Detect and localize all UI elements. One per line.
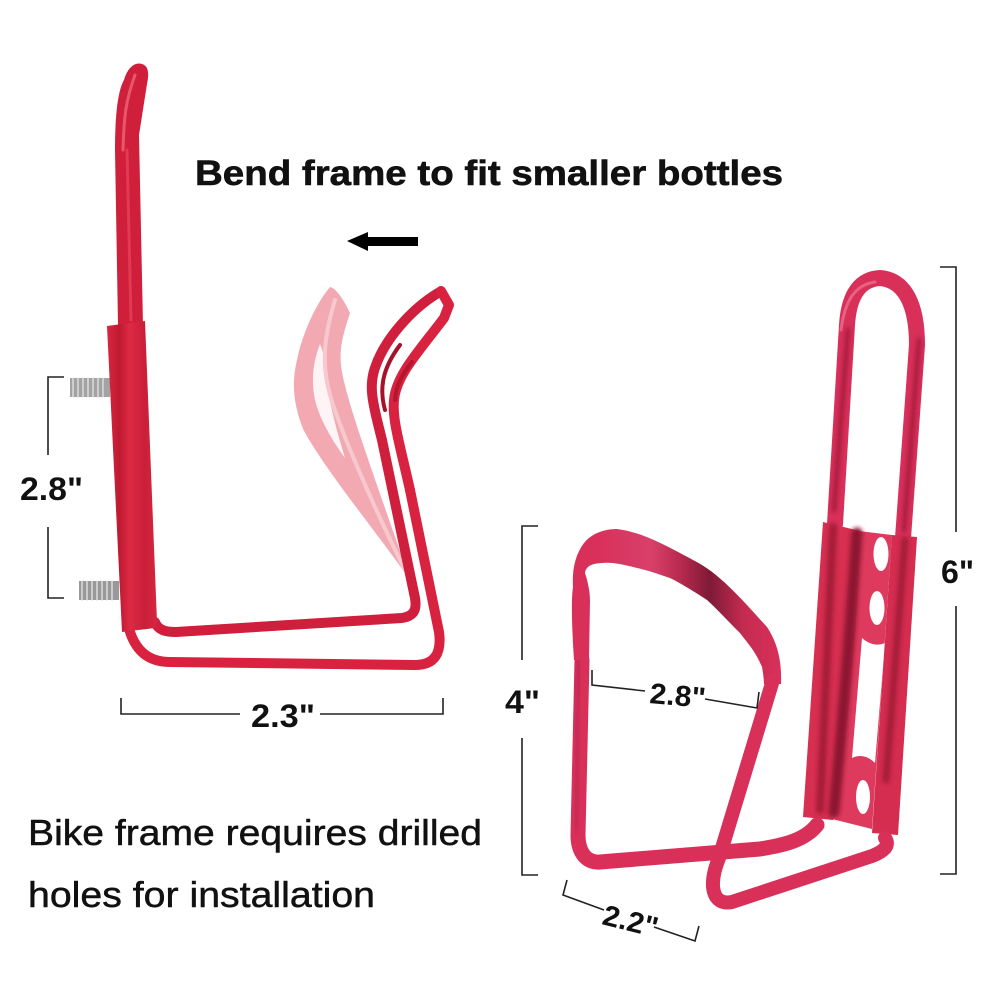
dimension: 6 inch height: 6" bbox=[941, 554, 974, 590]
dimension: 2.8 inch bolts bbox=[15, 377, 87, 598]
text: installation note: holes for installation bbox=[28, 874, 375, 915]
dimension: 2.8 inch cage width: 2.8" bbox=[648, 678, 707, 715]
cage front arm and top band bbox=[572, 529, 887, 902]
dimension: 2.2 inch depth: 2.2" bbox=[599, 900, 661, 944]
dimension: 6 inch height bbox=[935, 267, 985, 874]
upper tube bbox=[115, 64, 148, 325]
holes bbox=[874, 537, 888, 571]
arrow: bend direction bbox=[347, 232, 418, 251]
bolts bbox=[70, 378, 119, 600]
upper loop bbox=[835, 278, 917, 538]
dimension: 4 inch height bbox=[500, 526, 546, 875]
window bbox=[852, 638, 885, 763]
left strip bbox=[803, 522, 860, 820]
text: installation note: Bike frame requires drilled bbox=[28, 812, 482, 853]
heading: bend frame: Bend frame to fit smaller bottles bbox=[195, 154, 783, 193]
dimension: 2.8 inch cage width bbox=[592, 670, 759, 715]
dimension: 2.3 inch width: 2.3" bbox=[251, 698, 315, 734]
mounting plate bbox=[107, 321, 157, 632]
text: installation note bbox=[28, 812, 482, 915]
dimension: 2.2 inch depth bbox=[563, 880, 699, 944]
side view frame bbox=[107, 64, 449, 665]
ghost bent position bbox=[294, 287, 410, 580]
dimension: 4 inch height: 4" bbox=[505, 684, 540, 720]
cage lower back arm bbox=[578, 660, 817, 862]
dimension: 2.3 inch width bbox=[121, 695, 443, 734]
right strip bbox=[872, 535, 917, 835]
mounting plate bbox=[803, 522, 917, 835]
icon: right bottle cage bbox=[572, 278, 919, 902]
inner frame loop bbox=[155, 293, 438, 632]
outer frame loop bbox=[128, 291, 449, 665]
dimension: 2.8 inch bolts: 2.8" bbox=[20, 471, 83, 507]
central tab plate bbox=[828, 530, 892, 829]
icon: left bottle cage side view bbox=[70, 64, 449, 665]
